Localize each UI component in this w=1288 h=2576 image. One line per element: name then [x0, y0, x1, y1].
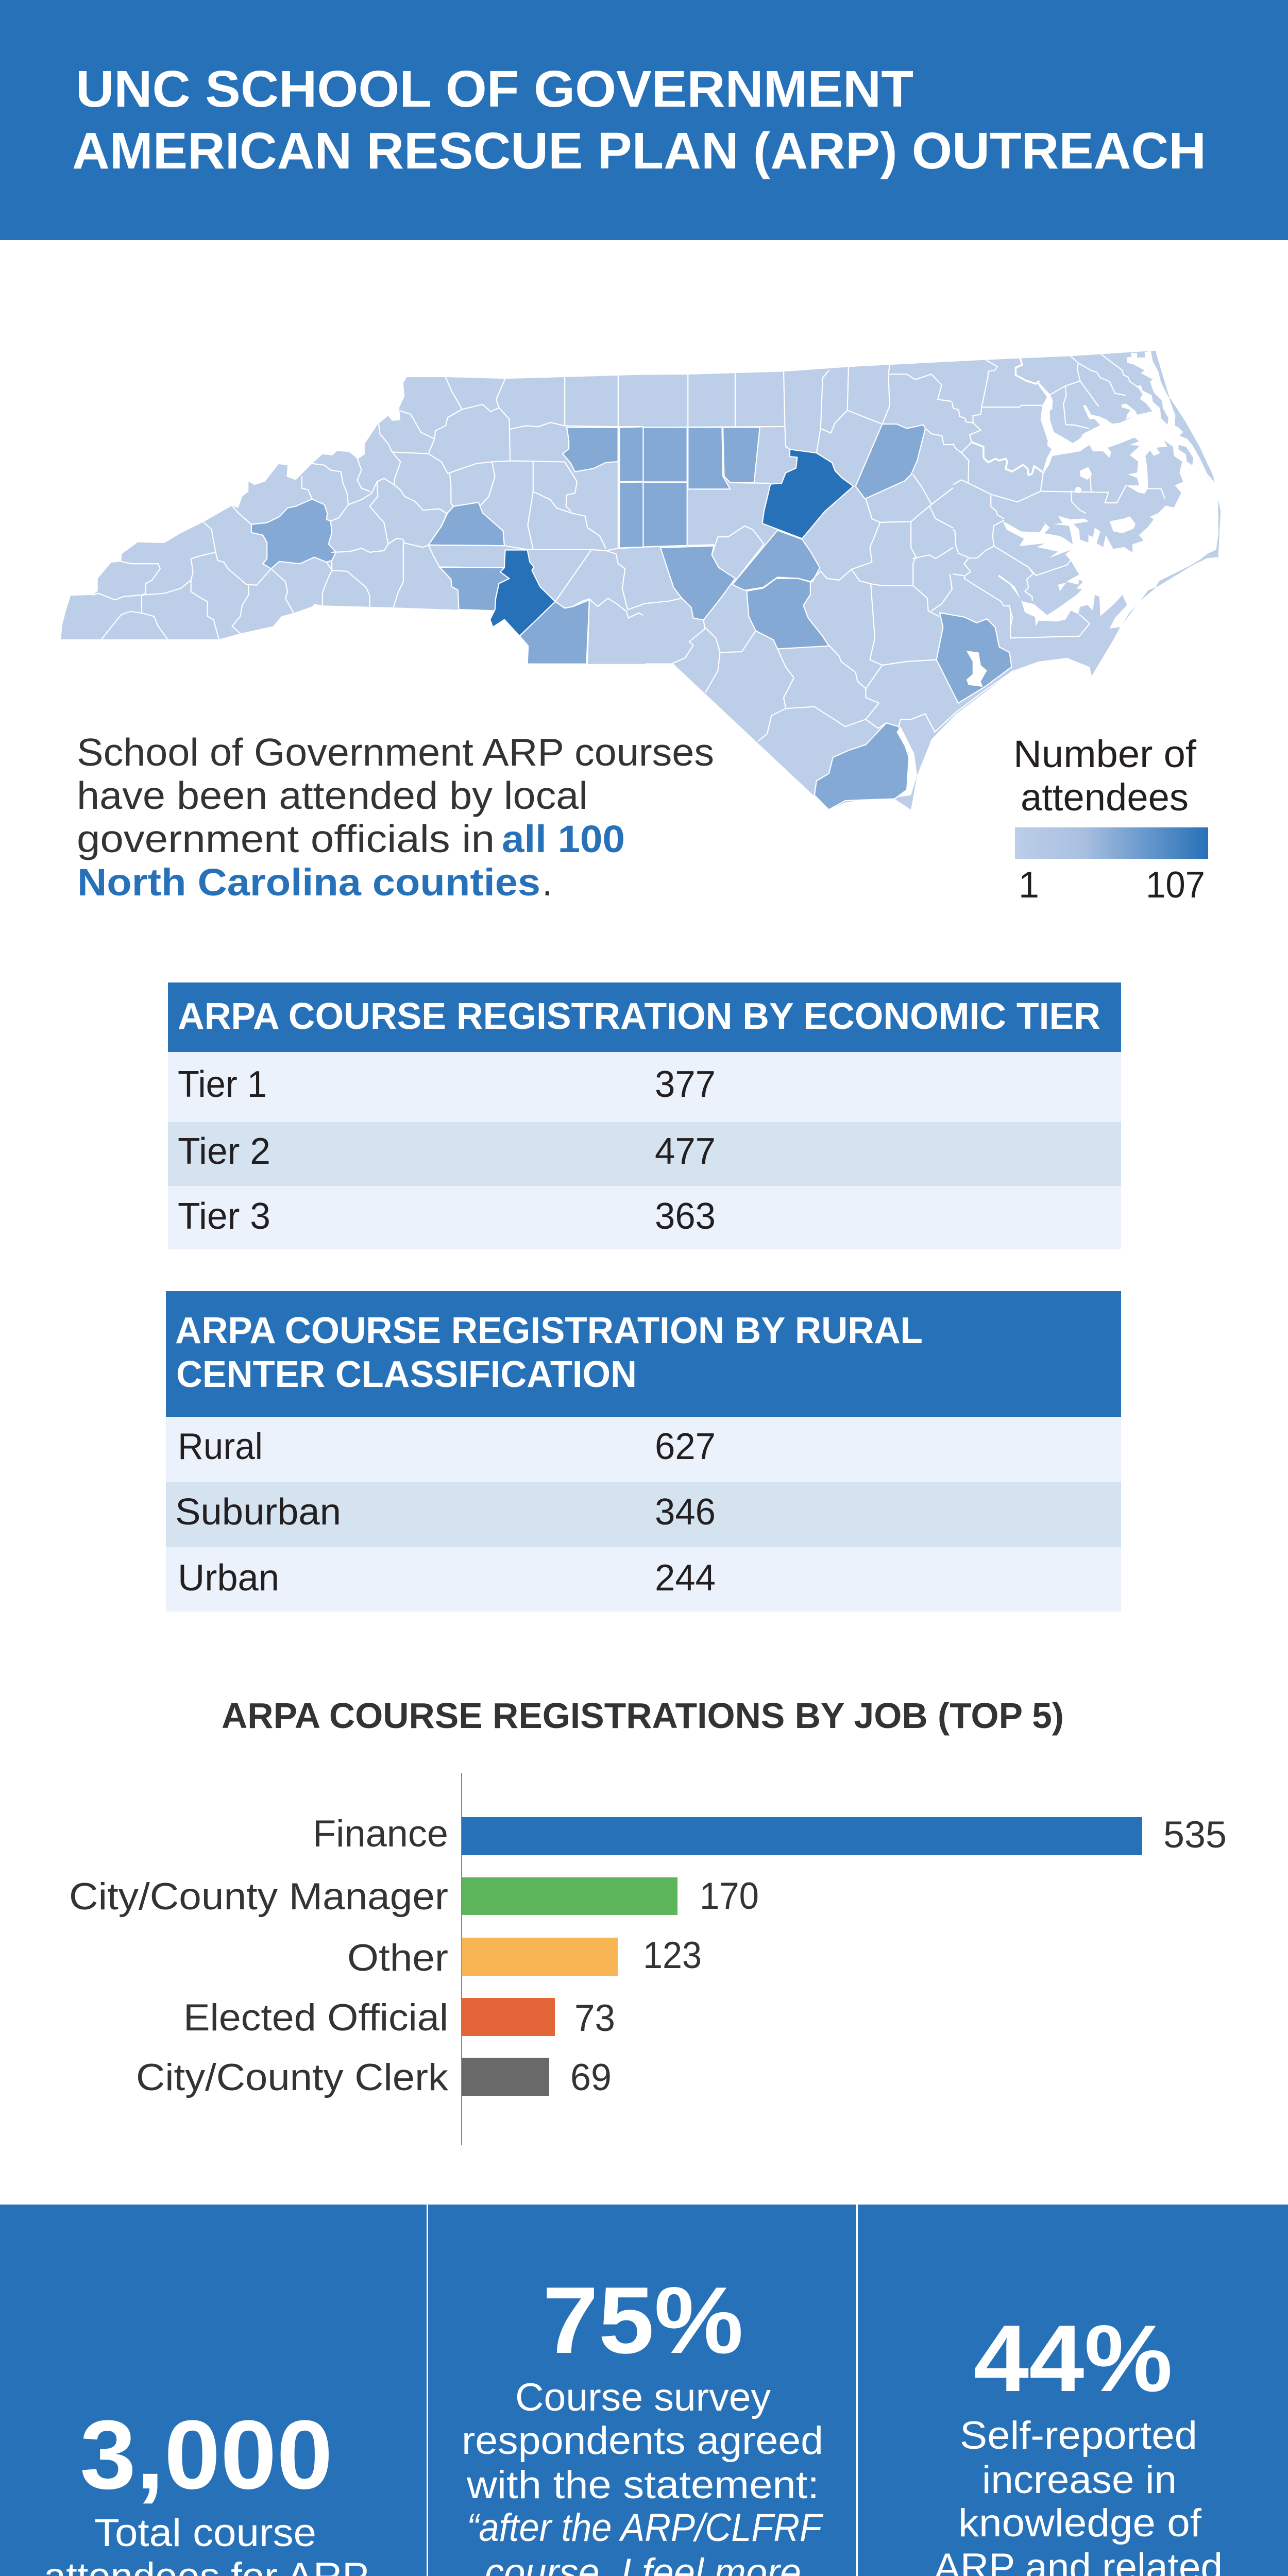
table: registration by economic tier: Tier 2: [178, 1131, 270, 1172]
panel: survey agreement statistic: Course survey: [515, 2376, 771, 2419]
panel: total attendees statistic: Total course: [94, 2511, 316, 2555]
bar: City/County Manager: 170: [700, 1875, 759, 1917]
table: registration by rural center classification: ARPA COURSE REGISTRATION BY RURAL: [175, 1310, 923, 1351]
bar: Other: 123: [643, 1935, 702, 1976]
table: registration by economic tier: 477: [655, 1131, 716, 1172]
panel: survey agreement statistic: 75%: [543, 2267, 743, 2373]
bar: City/County Clerk: City/County Clerk: [136, 2057, 449, 2098]
bar: Finance: [313, 1813, 1227, 1856]
table: registration by economic tier: ARPA COURSE REGISTRATION BY ECONOMIC TIER: [178, 996, 1100, 1037]
title banner: AMERICAN RESCUE PLAN (ARP) OUTREACH: [72, 122, 1206, 180]
bar: City/County Clerk: [136, 2057, 612, 2098]
bar: City/County Clerk: 69: [570, 2057, 612, 2098]
panel: survey agreement statistic: respondents agreed: [462, 2419, 823, 2463]
panel: knowledge increase statistic: knowledge of: [958, 2501, 1202, 2545]
panel: total attendees statistic: [44, 2400, 369, 2576]
map description text: have been attended by local: [77, 774, 588, 817]
panel: knowledge increase statistic: increase in: [982, 2458, 1177, 2502]
table: registration by rural center classification: 627: [655, 1426, 716, 1467]
bar: Elected Official: Elected Official: [183, 1997, 448, 2039]
table: registration by economic tier: 377: [655, 1064, 716, 1105]
table: registration by rural center classification: Suburban: [175, 1492, 341, 1533]
table: registration by rural center classification: CENTER CLASSIFICATION: [176, 1354, 637, 1395]
panel: total attendees statistic: 3,000: [80, 2400, 333, 2510]
bar chart: registrations by job: [69, 1773, 1227, 2145]
map description text: [77, 731, 714, 904]
chart title: ARPA COURSE REGISTRATIONS BY JOB (TOP 5): [222, 1696, 1064, 1736]
map description text: .: [542, 861, 553, 904]
panel: knowledge increase statistic: Self-reported: [960, 2414, 1197, 2458]
bar: Elected Official: [183, 1997, 615, 2039]
table: registration by economic tier: Tier 3: [178, 1196, 270, 1237]
bar: Finance: 535: [1163, 1814, 1227, 1856]
bar: Other: [347, 1935, 702, 1979]
map description text: all 100: [502, 818, 625, 860]
bar: City/County Manager: City/County Manager: [69, 1876, 448, 1918]
table: registration by rural center classification: [166, 1291, 1121, 1612]
map legend: number of attendees: 107: [1146, 865, 1205, 906]
table: registration by economic tier: [168, 982, 1121, 1249]
table: registration by rural center classification: Urban: [178, 1557, 279, 1599]
panel: knowledge increase statistic: 44%: [974, 2305, 1173, 2411]
map description text: government officials in: [77, 817, 495, 860]
map description text: North Carolina counties: [77, 861, 540, 904]
map legend: number of attendees: Number of: [1013, 733, 1196, 775]
map description text: School of Government ARP courses: [77, 731, 714, 774]
table: registration by economic tier: Tier 1: [178, 1064, 267, 1105]
map legend: number of attendees: [1013, 733, 1208, 906]
title banner: [0, 0, 1288, 240]
panel: survey agreement statistic: [462, 2267, 823, 2576]
panel: survey agreement statistic: with the statement:: [466, 2463, 819, 2507]
map legend: number of attendees: 1: [1019, 865, 1039, 906]
panel divider right: [856, 2205, 858, 2576]
table: registration by rural center classification: Rural: [178, 1426, 263, 1467]
bar: Finance: Finance: [313, 1813, 448, 1855]
panel: knowledge increase statistic: [928, 2305, 1228, 2576]
table: registration by rural center classification: 244: [655, 1557, 716, 1599]
table: registration by rural center classification: 346: [655, 1492, 716, 1533]
panel: survey agreement statistic: “after the ARP/CLFRF: [467, 2506, 823, 2550]
bar: Elected Official: 73: [574, 1997, 615, 2039]
bar: Other: Other: [347, 1937, 448, 1979]
panel divider left: [427, 2205, 428, 2576]
title banner: UNC SCHOOL OF GOVERNMENT: [76, 60, 913, 118]
blue statistics and footer background: [0, 2205, 1288, 2576]
choropleth map of North Carolina counties: [61, 351, 1221, 810]
bar: City/County Manager: [69, 1875, 759, 1918]
map legend: number of attendees: attendees: [1021, 776, 1189, 819]
table: registration by economic tier: 363: [655, 1196, 716, 1237]
